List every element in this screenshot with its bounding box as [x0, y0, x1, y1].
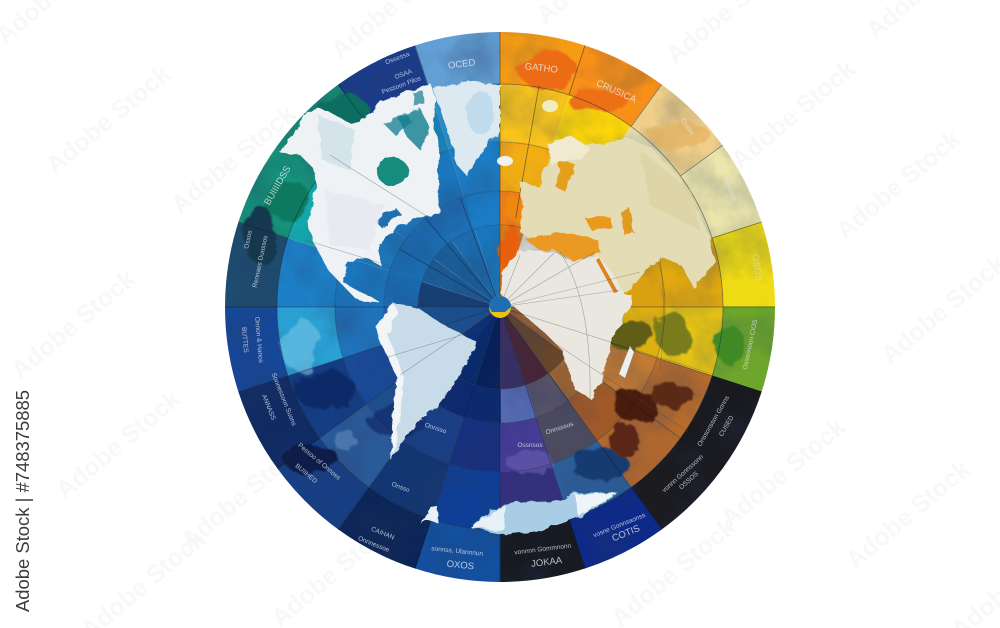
centre dot: [489, 296, 511, 318]
label: black right segment: Onssonsson Gonns: [696, 394, 731, 448]
label: navy top segment: Pessoon Pilos: [381, 75, 423, 96]
meridian lines over land: [305, 155, 715, 433]
segment labels: [240, 51, 764, 572]
colour blotches in segments: [244, 52, 744, 479]
label: lower-left blue segment: Pessoo of Onnoss: [296, 442, 342, 482]
label: orange segment 1: GATHO: [524, 61, 558, 76]
ring: second band: [229, 36, 771, 578]
label: green right segment: Ossonnoon CIOS: [742, 318, 759, 370]
label: dark teal segment: Rennaes Duossos: [252, 234, 270, 288]
label: bottom blue segment: OXOS: [446, 559, 474, 572]
label: bottom blue segment: [431, 545, 484, 572]
watercolour wash texture: [225, 32, 775, 582]
label: left navy segment: ANNASS: [260, 394, 277, 422]
watermark pattern: Adobe Stock: [176, 435, 311, 555]
watermark pattern: Adobe Stock: [6, 265, 141, 385]
label: inner map captions: Onsso: [390, 481, 411, 494]
land: Antarctica ice band: [420, 492, 618, 535]
label: inner map captions: Onnsssos: [545, 421, 575, 436]
land: Africa: [502, 250, 633, 400]
land: Greenland: [433, 82, 500, 177]
land: South America: [377, 303, 477, 460]
label: bottom-left dark segment: Onnnessoe: [357, 535, 391, 554]
ring and spoke lines: [225, 32, 775, 582]
label: green segment: BUIIIIDSS: [262, 164, 293, 207]
label: orange segment 2: CRUSICA: [594, 78, 638, 106]
label: left blue segment: [240, 317, 264, 364]
watermark pattern: Adobe Stock: [831, 125, 966, 245]
land: arctic island: [542, 100, 558, 112]
label: dark teal segment: [243, 229, 270, 288]
ring: outer label segments: [152, 0, 848, 628]
land: Madagascar: [619, 346, 634, 378]
watermark pattern: Adobe Stock: [716, 413, 851, 533]
label: dark teal segment: Ossos: [243, 229, 254, 249]
label: bottom-left dark segment: CAIHAN: [370, 526, 396, 542]
label: bottom black segment: JOKAA: [531, 555, 563, 570]
watermark pattern: Adobe Stock: [41, 60, 176, 180]
watermark pattern: Adobe Stock: [166, 100, 301, 220]
label: yellow segment: OSOS: [749, 253, 764, 282]
label: left navy segment: Sonnessoon Suons: [270, 372, 297, 428]
label: navy top segment: Ossessa: [384, 51, 411, 66]
label: inner map captions: [390, 421, 575, 494]
label: bottom black segment: [514, 543, 572, 570]
land: North America: [280, 83, 440, 304]
watermark pattern: Adobe Stock: [51, 385, 186, 505]
label: navy top segment: OSAA: [394, 68, 414, 81]
map: continents: [280, 82, 715, 535]
land: Iceland: [497, 156, 513, 166]
watermark pattern: Adobe Stock: [726, 55, 861, 175]
ring: fourth band: [362, 169, 638, 445]
watermark pattern: Adobe Stock: [841, 455, 976, 575]
land: Eurasia: [520, 135, 715, 295]
label: inner map captions: Ossnsos: [517, 442, 543, 449]
label: navy lower-right segment: vosne Gonnsaonss: [592, 512, 647, 539]
label: bottom black segment: vonnnn Gommnonn: [514, 543, 572, 556]
label: bottom-left dark segment: [357, 526, 396, 554]
label: lower-left blue segment: BUIIHED: [294, 463, 319, 485]
label: left blue segment: BUTTES: [240, 327, 249, 354]
ring: inner wedges: [443, 250, 557, 364]
credit: vertical stock number: Adobe Stock | #748375885: [12, 390, 33, 612]
label: pale segment: Onnssos: [721, 176, 738, 203]
label: top blue segment: OCED: [447, 57, 476, 72]
label: inner map captions: Onnsso: [424, 422, 448, 435]
label: tan segment: Ossos: [679, 118, 696, 137]
land: Red Sea: [596, 258, 618, 293]
label: left blue segment: Onnon & Hanos: [253, 317, 264, 364]
label: navy top segment: [381, 51, 423, 96]
label: bottom blue segment: sonnss, Ulannnun: [431, 545, 484, 558]
label: black right segment: CUSED: [718, 414, 736, 438]
label: navy lower-right segment: COTIS: [611, 523, 642, 544]
label: black lower-right segment: OSSOS: [678, 470, 700, 491]
label: black lower-right segment: vonnn Gonnssonn: [661, 453, 705, 494]
circular world map disc: [225, 32, 775, 582]
ring: third band: [304, 111, 696, 503]
